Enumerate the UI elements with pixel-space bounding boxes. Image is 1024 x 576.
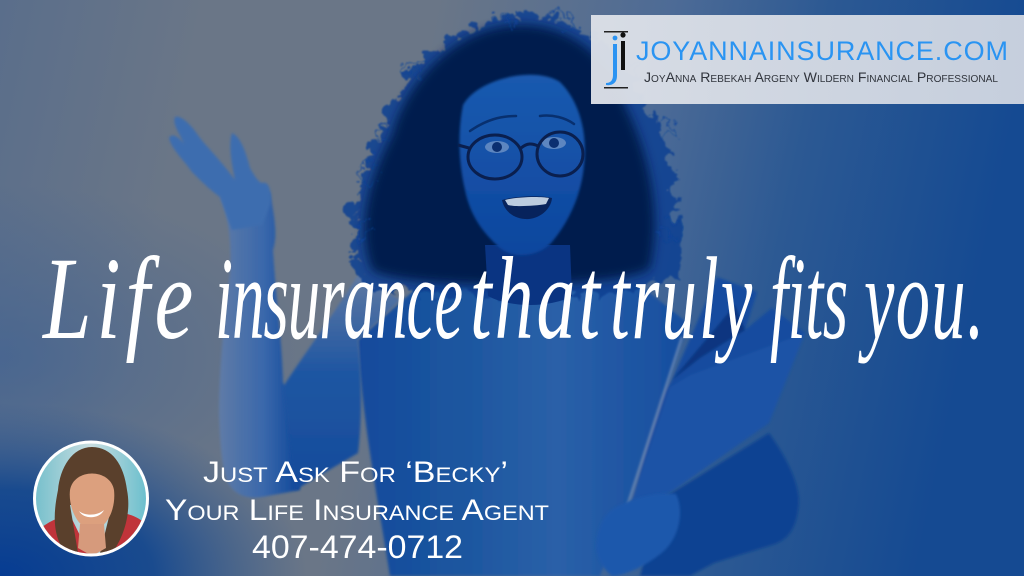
line one: Just Ask For ‘Becky’	[203, 456, 508, 489]
headline: you.	[858, 233, 984, 364]
photo: surprised woman holding a folder	[169, 8, 805, 576]
torso in t-shirt	[358, 285, 690, 576]
agent name line: JoyAnna Rebekah Argeny Wildern Financial Professional	[644, 69, 998, 85]
hand holding folder	[596, 493, 680, 576]
blue folder	[627, 277, 805, 520]
raised hand	[169, 117, 271, 230]
agent portrait	[30, 440, 152, 560]
face and neck	[70, 474, 114, 524]
raised arm	[219, 192, 300, 498]
red jacket	[44, 514, 142, 554]
eyebrows	[470, 115, 574, 131]
logo panel	[591, 15, 1024, 104]
lower arm	[640, 433, 799, 576]
glasses	[458, 132, 583, 179]
headline: that	[470, 233, 602, 364]
eyes	[485, 137, 566, 153]
phone number: 407-474-0712	[252, 529, 463, 565]
contact text	[165, 456, 549, 565]
headline: truly	[610, 234, 753, 365]
headline: Life	[41, 235, 193, 364]
face	[459, 75, 585, 255]
line two: Your Life Insurance Agent	[165, 494, 549, 527]
website name: JOYANNAINSURANCE.COM	[636, 36, 1008, 66]
sleeve	[283, 275, 400, 490]
neck	[485, 245, 572, 305]
open mouth	[502, 196, 552, 219]
icon: ji monogram	[604, 31, 628, 88]
headline: insurance	[215, 233, 463, 364]
curly hair	[347, 8, 674, 291]
hair	[55, 447, 128, 553]
headline	[41, 233, 984, 365]
headline: fits	[770, 233, 848, 364]
smile	[79, 510, 104, 517]
